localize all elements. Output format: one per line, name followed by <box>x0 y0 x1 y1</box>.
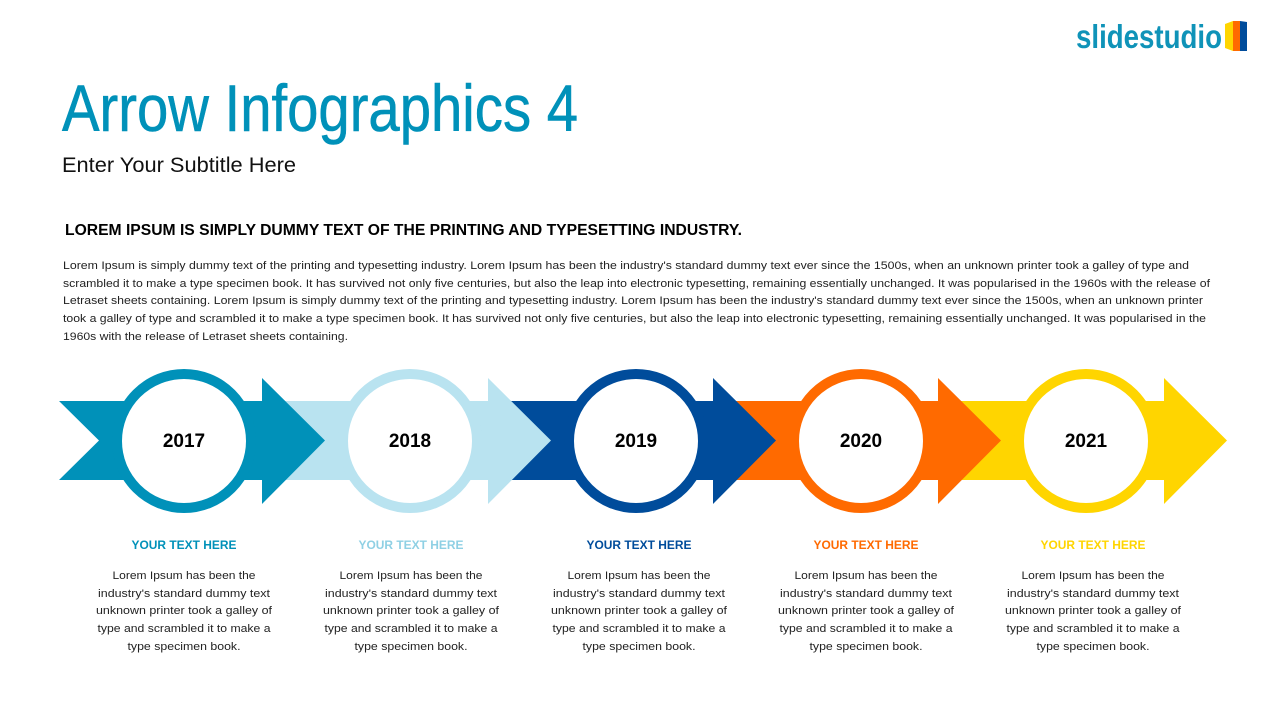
column 2021: Lorem Ipsum has been the <box>1022 570 1164 582</box>
title: Arrow Infographics 4 <box>62 71 578 145</box>
subtitle: Enter Your Subtitle Here <box>62 154 296 177</box>
column 2020: industry's standard dummy text <box>780 588 952 600</box>
column 2017: unknown printer took a galley of <box>96 605 273 617</box>
column 2021: industry's standard dummy text <box>1007 588 1179 600</box>
column 2017: Lorem Ipsum has been the <box>112 570 255 582</box>
column 2021: type specimen book. <box>1036 641 1150 653</box>
column 2020: Lorem Ipsum has been the <box>794 570 938 582</box>
body paragraph: 1960s with the release of Letraset sheets containing. <box>63 331 348 343</box>
section heading: LOREM IPSUM IS SIMPLY DUMMY TEXT OF THE PRINTING AND TYPESETTING INDUSTRY. <box>65 222 742 239</box>
column 2020: type and scrambled it to make a <box>780 623 953 635</box>
column 2018: type specimen book. <box>354 641 468 653</box>
arrow 2017 <box>59 374 325 508</box>
body paragraph: took a galley of type and scrambled it to make a type specimen book. It has survived not only five centuries, but also the leap into electronic typesetting, remaining essentially unchanged. It was popularised in the <box>63 313 1206 325</box>
arrow 2020 <box>735 374 1001 508</box>
column 2021 <box>1005 538 1182 653</box>
column 2021: unknown printer took a galley of <box>1005 605 1182 617</box>
logo: slidestudio <box>1076 18 1222 55</box>
arrow 2021 <box>960 374 1227 508</box>
column 2020: unknown printer took a galley of <box>778 605 955 617</box>
column 2019: industry's standard dummy text <box>553 588 725 600</box>
column 2019: Lorem Ipsum has been the <box>568 570 710 582</box>
arrow 2017: 2017 <box>163 431 205 452</box>
arrow 2018: 2018 <box>389 431 431 452</box>
arrow 2020: 2020 <box>840 431 882 452</box>
body paragraph <box>63 260 1211 343</box>
column 2017: industry's standard dummy text <box>98 588 270 600</box>
column 2018: Lorem Ipsum has been the <box>340 570 482 582</box>
body paragraph: scrambled it to make a type specimen book. It has survived not only five centuries, but also the leap into electronic typesetting, remaining essentially unchanged. It was popularised in the 1960s with the release of <box>63 278 1211 290</box>
column 2017: type and scrambled it to make a <box>98 623 271 635</box>
body paragraph: Letraset sheets containing. Lorem Ipsum is simply dummy text of the printing and typesetting industry. Lorem Ipsum has been the industry's standard dummy text ever since the 1500s, when an unknown printer <box>63 295 1203 307</box>
column 2021: YOUR TEXT HERE <box>1040 538 1146 552</box>
column 2018: type and scrambled it to make a <box>324 623 498 635</box>
column 2020: type specimen book. <box>810 641 922 653</box>
arrow 2018 <box>285 374 551 508</box>
column 2021: type and scrambled it to make a <box>1006 623 1180 635</box>
column 2017: YOUR TEXT HERE <box>132 538 236 552</box>
column 2019: type specimen book. <box>582 641 696 653</box>
arrow 2019 <box>510 374 776 508</box>
column 2018 <box>323 538 500 653</box>
body paragraph: Lorem Ipsum is simply dummy text of the printing and typesetting industry. Lorem Ipsum has been the industry's standard dummy text ever since the 1500s, when an unknown printer took a galley of type and <box>63 260 1189 272</box>
arrow 2021: 2021 <box>1065 431 1108 452</box>
column 2018: YOUR TEXT HERE <box>358 538 464 552</box>
column 2020: YOUR TEXT HERE <box>814 538 918 552</box>
column 2017 <box>96 538 273 653</box>
column 2018: industry's standard dummy text <box>325 588 497 600</box>
column 2019 <box>551 538 728 653</box>
column 2019: unknown printer took a galley of <box>551 605 728 617</box>
column 2017: type specimen book. <box>128 641 240 653</box>
column 2019: YOUR TEXT HERE <box>586 538 692 552</box>
column 2018: unknown printer took a galley of <box>323 605 500 617</box>
arrow 2019: 2019 <box>615 431 657 452</box>
column 2019: type and scrambled it to make a <box>552 623 726 635</box>
column 2020 <box>778 538 955 653</box>
